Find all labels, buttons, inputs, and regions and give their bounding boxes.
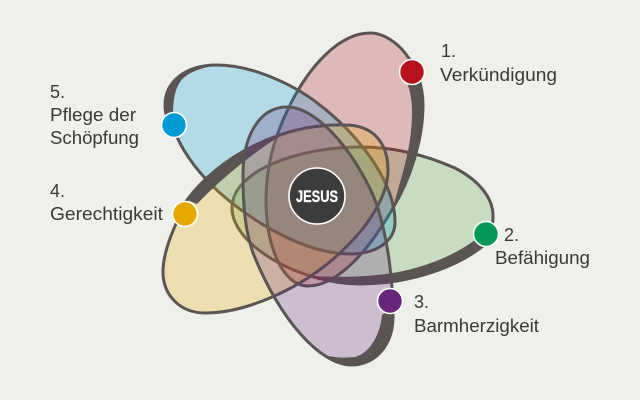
label 2: 2. — [504, 225, 519, 245]
petal: green Befähigung — [232, 147, 493, 284]
petal: blue Pflege der Schöpfung — [165, 65, 395, 254]
label 1: Verkündigung — [440, 65, 557, 85]
label 5: Pflege der — [50, 105, 136, 125]
dot: green — [474, 222, 498, 246]
center: JESUS — [289, 168, 345, 224]
dot: blue — [162, 112, 186, 138]
dot: red — [400, 60, 424, 84]
label 3: 3. — [414, 292, 429, 312]
label 3: Barmherzigkeit — [414, 316, 539, 336]
label 4: Gerechtigkeit — [50, 204, 163, 224]
dot: purple — [378, 288, 402, 314]
label 5 — [50, 82, 139, 148]
label 4 — [50, 181, 163, 224]
label 5: 5. — [50, 82, 65, 102]
center: JESUS: JESUS — [296, 187, 338, 206]
petal: purple Barmherzigkeit — [243, 107, 393, 365]
label 4: 4. — [50, 181, 65, 201]
label 3 — [414, 292, 539, 336]
label 1 — [440, 41, 557, 85]
petal: yellow Gerechtigkeit — [163, 125, 388, 313]
label 5: Schöpfung — [50, 128, 139, 148]
label 1: 1. — [441, 41, 456, 61]
label 2 — [495, 225, 590, 268]
petal: red Verkündigung — [266, 33, 423, 286]
dot: yellow — [172, 202, 198, 226]
label 2: Befähigung — [495, 248, 590, 268]
